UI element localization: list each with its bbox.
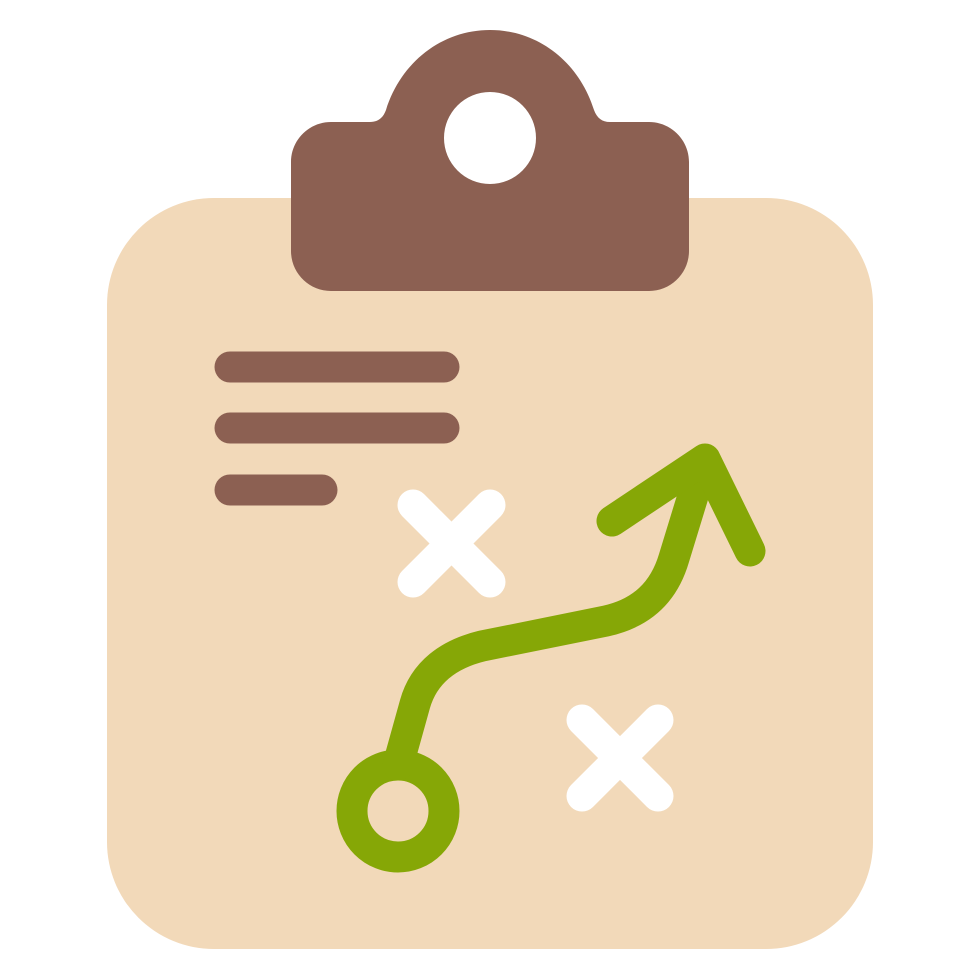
green play arrow [352,459,750,857]
clipboard board [107,198,873,949]
clipboard clip [291,30,689,291]
curved route [398,460,704,765]
start circle [352,765,444,857]
white x mark upper [413,505,490,582]
white x mark lower [582,720,658,796]
text lines [230,367,444,490]
arrow head [612,459,750,551]
